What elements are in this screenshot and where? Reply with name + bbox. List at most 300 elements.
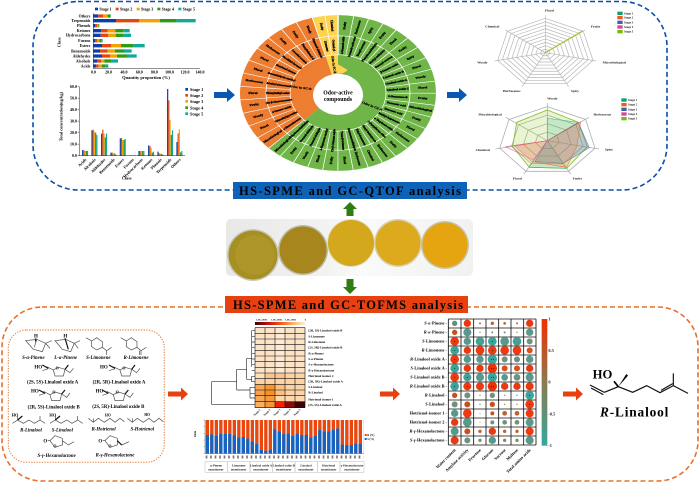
group labels: α-Pinene (210, 464, 223, 468)
heading: HS-SPME and GC-QTOF analysis: HS-SPME and GC-QTOF analysis (239, 184, 461, 198)
middle ring labels: green: α-Terpineol-oxide (373, 116, 395, 132)
outer ring labels: orange and yellow: Fruity (291, 30, 300, 39)
compound names (22, 356, 149, 361)
middle ring labels: green: Geranyl-acetone (374, 54, 394, 69)
compound names: S-α-Pinene (22, 356, 45, 361)
row labels: R-Limonene - (422, 348, 448, 353)
outer ring labels: orange and yellow (245, 20, 335, 144)
colour bar labels: 0 (548, 380, 551, 385)
row labels: R-γ-Hexanolactone (308, 368, 335, 372)
x labels: Others (170, 157, 182, 169)
outer ring labels: orange and yellow: Floral (259, 56, 270, 63)
axis ticks: 0.0 (91, 69, 96, 74)
atom labels: O (53, 443, 56, 448)
middle ring labels: green: Dihydroactinidiolide (288, 119, 310, 139)
legend: Stage 1 (624, 11, 634, 15)
row labels: R-γ-Hexanolactone - (409, 429, 448, 434)
legend: Stage 2 (624, 16, 634, 20)
middle ring labels: green: Methyl-salicylate (368, 48, 387, 65)
axis ticks: 20.0 (105, 69, 112, 74)
row labels: S-Limonene (308, 334, 325, 338)
inner ring labels: Odor in CS-X (361, 101, 384, 112)
outer ring labels: green: Microbiological (273, 136, 292, 153)
outer ring labels: orange and yellow: Fruity (249, 102, 260, 107)
chart: odor-active compounds sunburst (245, 19, 433, 167)
outer ring labels: green: Fruity (389, 140, 398, 149)
column labels: Total amino acids (505, 447, 532, 474)
legend (185, 87, 204, 116)
class labels: Benzenoids (71, 48, 91, 53)
atom labels: HO (96, 390, 104, 395)
outer ring labels: orange and yellow: Microbiological (262, 129, 283, 144)
middle ring labels: orange and yellow: Phenylethanol-ol (300, 43, 316, 61)
column labels: Glucose (480, 447, 494, 461)
column labels: Water content (435, 447, 457, 470)
red R share (206, 387, 363, 485)
legend: Stage 1 (628, 98, 638, 102)
outer ring labels: orange and yellow: Woody (305, 25, 313, 34)
legend: Stage 5 (628, 117, 638, 121)
row labels: S-Linalool oxide B - (410, 375, 448, 380)
outer ring labels: green: Floral (342, 157, 347, 164)
outer ring labels: green: Fruity (289, 146, 298, 155)
chart: correlation matrix (409, 316, 555, 474)
linalool oxide names (27, 381, 146, 411)
middle ring labels: green: Nonanal-aldehyde (308, 127, 322, 147)
middle ring labels: green: Phenylacetaldehyde (360, 42, 379, 62)
arrow: blue to radar charts (447, 88, 467, 102)
group labels: Hotrienol (322, 464, 335, 468)
row labels: S-Linalool oxide A - (411, 366, 448, 371)
radar labels: Herbaceous (594, 112, 612, 116)
outer ring labels: green: Chemical (366, 150, 375, 161)
colour bar (542, 319, 547, 446)
linalool and hotrienol names: S-Hotrienol (131, 428, 155, 433)
class labels: Acids (81, 63, 91, 68)
class labels: Aldehydes (73, 53, 91, 58)
column labels: Maltose (505, 447, 519, 461)
group labels (208, 464, 364, 471)
middle ring labels: green: Hexyl-isobutyrate (361, 124, 378, 143)
outer ring labels: orange and yellow: Herbaceous (265, 44, 282, 56)
HO label: HO (593, 368, 613, 382)
column labels: Amylase activity (444, 447, 470, 473)
row labels: Hotrienol isomer 1 (308, 397, 334, 401)
atom labels: H (34, 334, 38, 339)
legend: Stage 4 (190, 105, 204, 110)
middle ring labels: orange and yellow (265, 38, 337, 131)
radar labels: Herbaceous (503, 89, 521, 93)
class labels: Terpenoids (71, 18, 91, 23)
colour bar labels: 1 (548, 316, 551, 321)
outer ring labels: orange and yellow: Chemical (329, 20, 335, 31)
linalool and hotrienol names (20, 428, 155, 459)
bars (93, 16, 196, 66)
heading: HS-SPME and GC-TOFMS analysis: HS-SPME and GC-TOFMS analysis (233, 298, 463, 312)
arrow: green down (343, 279, 357, 294)
atom labels: HO (34, 365, 42, 370)
legend: stage colours top: Stage 2 (120, 6, 132, 11)
row labels (308, 329, 344, 407)
atom labels: HO (31, 390, 39, 395)
rings (253, 25, 423, 161)
outer ring labels: orange and yellow: Fruity (319, 23, 325, 31)
y ticks: 20.0 (70, 130, 77, 135)
middle ring labels: orange and yellow: Trimethylpyrazine (274, 110, 299, 123)
blue S share (207, 429, 360, 453)
x labels: Esters (114, 157, 125, 169)
radar labels: Spicy (605, 148, 613, 152)
legend: Stage 1 (190, 87, 203, 92)
linalool oxide names: (2R, 5S)-Linalool oxide B (28, 406, 80, 411)
y axis (204, 420, 364, 454)
atom labels: HO (100, 365, 108, 370)
legend: Stage 5 (624, 30, 634, 34)
legend: Stage 3 (190, 99, 204, 104)
outer ring labels: green: Fruity (418, 96, 428, 100)
linalool oxide names: (2S, 5S)-Linalool oxide A (27, 381, 79, 386)
middle ring labels: orange and yellow: Hotrienol-isomer (275, 63, 298, 76)
column labels (252, 407, 302, 417)
atom labels: O (116, 389, 119, 394)
middle ring labels: green: Ethyl-hexanoate (355, 128, 368, 146)
outer ring labels: green: Woody (415, 74, 427, 80)
chart: enantiomer ratio stacked bars (194, 420, 374, 472)
middle ring labels: orange and yellow: (E)-β-Damascenone (265, 98, 293, 105)
y title: Total concentration(ug/kg) (59, 91, 64, 141)
middle ring labels: green (288, 35, 409, 152)
chart: total concentration grouped bars (59, 84, 204, 180)
skeleton (590, 373, 688, 395)
x labels: Furans (122, 157, 135, 170)
inner ring labels: Odor in SC-B (289, 84, 313, 91)
outer ring labels: orange and yellow: Woody (252, 113, 264, 119)
legend: stage colours top: Stage 4 (162, 6, 174, 11)
photo: five fermentation plates (226, 219, 473, 281)
colour bar ticks (256, 319, 307, 322)
axis title: class: Class (57, 37, 62, 47)
axis ticks: 120.0 (181, 69, 189, 74)
legend: stage colours top: Stage 5 (183, 6, 195, 11)
legend: R (%) (367, 434, 374, 437)
compound names: S-Limonene (86, 356, 111, 361)
data: stage 5 (513, 110, 587, 168)
row labels: Hotrienol-isomer 2 - (410, 420, 448, 425)
compound names: R-Limonene (124, 356, 149, 361)
outer ring labels: orange and yellow: Floral (259, 123, 270, 130)
radar labels: Woody (547, 96, 558, 100)
grid (448, 319, 536, 445)
legend: stage colours top: Stage 1 (99, 6, 112, 11)
class labels: Esters (80, 43, 91, 48)
radar labels: Chemical (476, 148, 490, 152)
linalool and hotrienol names: S-γ-Hexanolactone (38, 454, 77, 459)
column labels: Stage 2 (262, 407, 272, 417)
middle ring labels: orange and yellow: Phenylethyl-ester (266, 91, 291, 95)
class labels (66, 13, 91, 68)
atom labels (12, 334, 150, 448)
molecule: R-linalool (590, 368, 688, 419)
legend: Stage 4 (628, 112, 638, 116)
row labels: Hotrienol isomer 2 (308, 374, 334, 378)
outer ring labels: orange and yellow: Floral (253, 67, 263, 73)
column labels: Sucrose (493, 447, 507, 461)
legend: Stage 3 (628, 107, 638, 111)
row labels: R-Linalool - (425, 393, 448, 398)
radar labels (477, 9, 626, 93)
class labels: Hydrocarbons (66, 33, 91, 38)
outer ring labels: green: Fruity (342, 21, 347, 30)
row labels: R-α-Pinene - (424, 330, 448, 335)
outer ring labels: green: Herbaceous (354, 19, 362, 35)
axis ticks: 140.0 (196, 69, 204, 74)
radar labels: Microbiological (478, 112, 502, 116)
heat cells (255, 328, 305, 408)
legend: stage colours top (95, 6, 195, 11)
outer ring labels: green: Floral (388, 38, 398, 45)
axis title: Quantity proportion (%) (122, 75, 170, 80)
arrow: red to correlation matrix (380, 388, 400, 400)
column labels: Stage 3 (272, 407, 282, 417)
panel: chiral compound structures (8, 330, 164, 462)
panel: HS-SPME and GC-TOFMS dashed frame (2, 307, 698, 481)
row labels: S-Linalool (308, 385, 322, 389)
outer ring labels: orange and yellow: Herbaceous (245, 78, 264, 84)
middle ring labels: green: Nonanoic acid (386, 101, 407, 108)
row labels: Hotrienol-isomer 1 - (410, 411, 448, 416)
legend: S (%) (367, 438, 374, 441)
colour bar labels: 0.5 (548, 348, 554, 353)
column labels: Stage 5 (292, 407, 302, 417)
atom labels: O (122, 365, 125, 370)
colour bar ticks: 1.0E+0002 (271, 319, 283, 322)
outer ring labels: green: Spicy (406, 54, 415, 61)
x labels: Aldehydes (90, 157, 107, 174)
legend: Stage 2 (190, 93, 203, 98)
y ticks: 30.0 (70, 118, 77, 123)
linalool and hotrienol names: S-Linalool (52, 428, 74, 433)
legend: stage colours top: Stage 3 (141, 6, 153, 11)
inner ring labels: Odor in SC-B (330, 56, 337, 74)
group labels: γ-Hexanolactone (340, 464, 364, 468)
outer ring labels: green: Fruity (398, 45, 408, 53)
middle ring labels: orange and yellow: Geraniol-acetate (291, 48, 309, 65)
radar labels: Floral (545, 9, 554, 13)
outer ring labels: green: Floral (418, 86, 428, 90)
outer ring labels: green: Microbiological (409, 105, 433, 113)
colour bar ticks: 1.0E+0003 (256, 319, 268, 322)
row labels: S-Linalool - (425, 402, 448, 407)
group labels: enantiomer (276, 467, 292, 471)
centre label: odor-active compounds: compounds (324, 97, 353, 103)
outer ring labels: green: Fruity (378, 31, 387, 39)
arrow: blue to sunburst (214, 88, 235, 102)
row labels (409, 321, 448, 443)
atom labels: O (52, 389, 55, 394)
x labels: Acids (77, 157, 88, 168)
outer ring labels: green (273, 19, 433, 167)
group labels: enantiomer (344, 467, 360, 471)
row labels: S-Limonene - (422, 339, 448, 344)
middle ring labels: orange and yellow: α-Ionone-oxide (271, 105, 293, 114)
bars (83, 89, 182, 156)
group labels: Linalool oxide A (250, 464, 273, 468)
group labels: enantiomer (231, 467, 247, 471)
class labels: Phenols (77, 23, 91, 28)
axis ticks: 100.0 (165, 69, 174, 74)
class labels: Furans (78, 38, 91, 43)
legend (365, 434, 374, 441)
row labels: (2R, 5R)-Linalool oxide A (308, 380, 344, 384)
middle ring labels: orange and yellow: Octanal-yl (331, 40, 337, 51)
outer ring labels: green: Floral (315, 155, 321, 163)
row labels: S-γ-Hexanolactone (308, 363, 334, 367)
atom labels: O (98, 440, 102, 445)
middle ring labels: green: 1-Nonanol-oxide (340, 36, 346, 54)
significance marks (454, 341, 530, 405)
x labels: Terpenoids (155, 157, 173, 175)
middle ring labels: green: Benzeneacetaldehyde (347, 128, 358, 152)
data: stage 3 (535, 122, 589, 163)
group labels: Limonene (232, 464, 246, 468)
group labels: enantiomer (298, 467, 314, 471)
legend: Stage 5 (190, 111, 203, 116)
middle ring labels: orange and yellow: Nerolidol-farnesol (281, 55, 303, 70)
colour bar ticks: 1.0E+0001 (285, 319, 297, 322)
linalool and hotrienol names: R-γ-Hexanolactone (96, 453, 135, 458)
outer ring labels: green: Herbaceous (395, 131, 412, 143)
axis ticks (91, 69, 204, 74)
middle ring labels: orange and yellow: γ-Hexanolactone (281, 116, 303, 131)
x labels: Hydrocarbons (122, 157, 144, 179)
centre label: odor-active compounds (313, 75, 363, 115)
x labels: Ketones (140, 157, 154, 171)
data line (545, 31, 583, 53)
row labels: S-α-Pinene - (424, 321, 448, 326)
row labels: R-Linalool oxide A - (410, 357, 448, 362)
middle ring labels: orange and yellow: Benzaldehyde-methyl (267, 71, 296, 82)
row labels: (2S, 5S)-Linalool oxide A (308, 403, 343, 407)
atom labels: HO (12, 413, 19, 418)
row labels: S-γ-Hexanolactone - (410, 438, 448, 443)
column labels: Fructose (467, 447, 482, 462)
outer ring labels: green: Fruity (411, 116, 422, 122)
radar labels (476, 96, 613, 181)
radar labels: Chemical (485, 25, 499, 29)
linalool and hotrienol names: R-Linalool (20, 428, 43, 433)
outer ring labels: green: Herbaceous (376, 144, 389, 158)
data: stage 2 (515, 122, 581, 167)
panel: HS-SPME and GC-QTOF dashed frame (33, 2, 667, 190)
y ticks (70, 84, 77, 158)
radar labels: Floral (513, 177, 522, 181)
ratio title: Ratio (194, 430, 197, 437)
row labels: R-Limonene (308, 340, 326, 344)
radar grid (495, 15, 596, 87)
outer ring labels: green: Woody (301, 151, 310, 160)
y ticks: 10.0 (70, 141, 77, 146)
colour bar labels: -0.5 (548, 411, 555, 416)
linalool oxide names: (2S, 5R)-Linalool oxide B (92, 405, 145, 410)
radar labels: Spicy (571, 89, 579, 93)
column labels: Stage 4 (282, 407, 292, 417)
outer ring labels: green: Herbaceous (354, 151, 362, 167)
colour bar (255, 322, 305, 325)
atom labels: H (63, 334, 67, 339)
centre label: odor-active compounds: Odor-active (323, 90, 353, 96)
colour bar ticks: 0 (305, 319, 307, 322)
middle ring labels: green: Trans-β-Ocimene (340, 131, 346, 151)
atom labels: HO (105, 414, 111, 418)
chart: enantiomer heatmap (212, 319, 344, 417)
outer ring labels: green: Floral (411, 64, 422, 70)
middle ring labels: green: Decanal-aldehyde (298, 124, 315, 143)
middle ring labels: green: Linalool oxide B (382, 70, 405, 80)
chart: bottom aroma radar (476, 96, 638, 181)
x labels: Alcohols (82, 157, 97, 171)
radar labels: Fruity (573, 177, 582, 181)
atom labels: HO (49, 413, 57, 418)
middle ring labels: orange and yellow: Heptanal-aldehyde (311, 38, 324, 59)
middle ring labels: green: Decanoic acid-ester (347, 35, 357, 57)
radar labels: Microbiological (603, 60, 626, 64)
arrow: red to heatmap (168, 388, 188, 400)
column labels: Stage 1 (252, 407, 262, 417)
outer ring labels: orange and yellow: Fruity (279, 37, 288, 45)
class labels: Ketones (77, 28, 91, 33)
y ticks: 60.0 (70, 84, 77, 89)
column labels (435, 447, 532, 474)
x labels (77, 157, 182, 179)
outer ring labels: green: Fruity (329, 156, 334, 164)
colour bar labels (548, 316, 555, 448)
middle ring labels: green: Cis-β-Ocimene-oxide (330, 128, 337, 152)
outer ring labels: green: Floral (405, 125, 416, 132)
arrow: green up (343, 202, 357, 216)
axis ticks: 80.0 (151, 69, 158, 74)
group label boxes (205, 462, 364, 472)
group labels: enantiomer (253, 467, 269, 471)
hashed bond (614, 381, 618, 387)
axis ticks: 40.0 (121, 69, 127, 74)
atom labels: O (56, 365, 59, 370)
group labels: enantiomer (208, 467, 224, 471)
compound names: L-α-Pinene (53, 356, 78, 361)
middle ring labels: green: Hexanoic acid (384, 107, 404, 116)
atom labels: O (43, 440, 47, 445)
middle ring labels: green: Methyl-heptenone (378, 111, 402, 125)
structure drawings (12, 338, 163, 447)
middle ring labels: orange and yellow: Limonene (323, 41, 330, 52)
row labels: (2R, 5S)-Linalool oxide B (308, 329, 343, 333)
stage ticks (206, 452, 363, 461)
atom labels: HO (144, 413, 150, 417)
x labels: Benzenoids (98, 157, 116, 175)
x title: Class (122, 175, 132, 180)
group labels: Linalool (300, 464, 312, 468)
radar labels: Woody (477, 60, 488, 64)
row labels: S-α-Pinene (308, 357, 324, 361)
legend: Stage 4 (624, 25, 634, 29)
chart: top aroma radar (477, 9, 634, 93)
row labels: (2S, 5R)-Linalool oxide B (308, 346, 343, 350)
legend: Stage 2 (628, 103, 638, 107)
row labels: R-Linalool (308, 391, 323, 395)
atom labels: O (108, 443, 111, 448)
panel border (8, 330, 164, 462)
middle ring labels: green: 2-Heptanone-methyl (318, 128, 329, 151)
data: stage 4 (505, 141, 547, 160)
